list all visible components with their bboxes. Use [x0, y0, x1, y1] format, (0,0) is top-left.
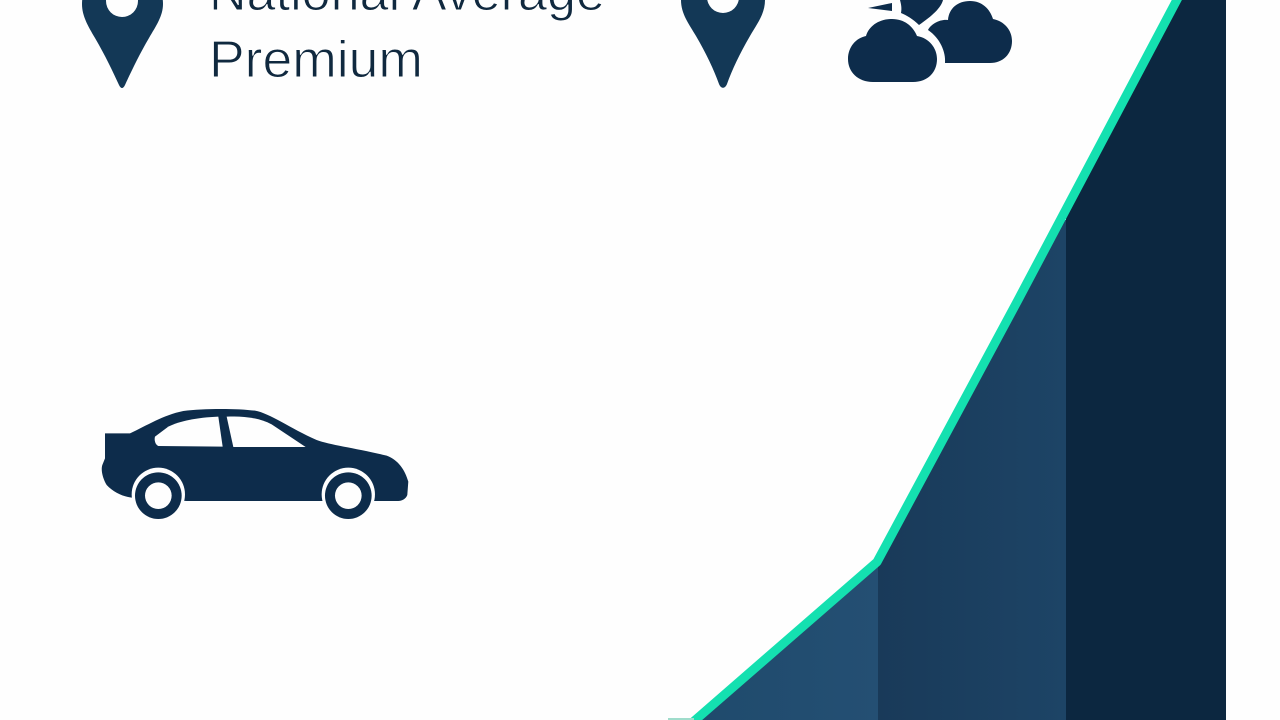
chart line tail: [668, 718, 694, 720]
icon: right location pin: [681, 0, 765, 88]
chart: rising area with three bands: [668, 0, 1226, 720]
icon: left location pin: [82, 0, 163, 88]
icon: car: [102, 409, 408, 521]
front wheel: [322, 468, 375, 521]
right cloud: [928, 1, 1012, 63]
heading: National Average Premium: [209, 0, 605, 89]
chart line: [693, 0, 1180, 720]
left cloud: [848, 19, 937, 82]
rear wheel: [132, 468, 185, 521]
icon: sun behind clouds: [848, 0, 1012, 82]
heading: National Average Premium: Premium: [209, 31, 423, 89]
